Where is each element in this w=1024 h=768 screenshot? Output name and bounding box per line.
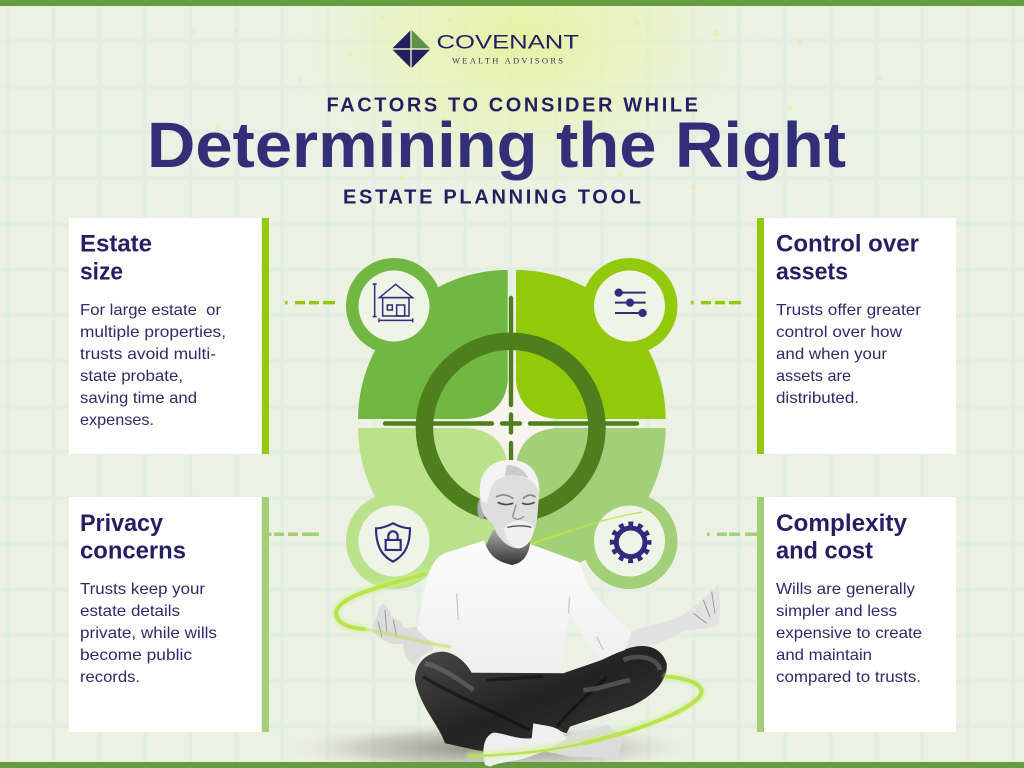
logo mark xyxy=(392,30,430,68)
privacy text xyxy=(80,581,217,686)
control text: Trusts offer greater xyxy=(776,302,922,319)
face details xyxy=(497,495,535,519)
control text: control over how xyxy=(776,324,902,341)
shirt xyxy=(417,541,632,673)
quadrant: control over assets xyxy=(516,258,678,419)
privacy heading: Privacy xyxy=(80,510,164,537)
glowing ring: front section xyxy=(363,629,702,756)
hair xyxy=(480,460,539,503)
complexity heading: Complexity xyxy=(776,510,908,537)
left arm and hand xyxy=(373,604,433,665)
estate size text: state probate, xyxy=(80,368,183,385)
complexity text xyxy=(776,581,922,686)
person meditating xyxy=(373,460,720,767)
logo xyxy=(392,30,580,68)
icon disc: shield xyxy=(358,506,430,576)
privacy text: records. xyxy=(80,669,140,686)
crosshair lines xyxy=(385,298,637,470)
privacy heading xyxy=(80,510,186,565)
top bar xyxy=(0,0,1024,6)
sub heading: ESTATE PLANNING TOOL xyxy=(343,186,641,208)
yellow glow behind header xyxy=(260,0,780,215)
glowing ring: back section xyxy=(336,512,642,629)
panel: privacy concerns xyxy=(69,497,269,732)
icon: gear xyxy=(613,524,649,560)
icon disc: house xyxy=(358,270,430,342)
control heading: Control over xyxy=(776,231,919,258)
centre ring xyxy=(424,341,597,514)
beard xyxy=(504,521,534,548)
header xyxy=(147,95,846,208)
control text xyxy=(776,302,922,407)
connector: estate size xyxy=(285,301,335,304)
icon: house xyxy=(373,284,413,322)
control heading: assets xyxy=(776,258,848,286)
pants xyxy=(415,646,667,752)
privacy heading: concerns xyxy=(80,538,186,565)
complexity text: expensive to create xyxy=(776,625,922,642)
panel: control over assets xyxy=(757,218,956,454)
central quadrant diagram xyxy=(346,258,678,589)
control heading xyxy=(776,231,919,286)
estate size text: For large estate or xyxy=(80,302,222,319)
estate size text: trusts avoid multi- xyxy=(80,346,216,363)
icon disc: gear xyxy=(594,506,665,576)
estate size heading xyxy=(80,231,152,286)
quadrant: estate size xyxy=(346,258,508,419)
foot: front xyxy=(483,723,566,767)
connector: privacy concerns xyxy=(269,533,319,536)
privacy text: become public xyxy=(80,647,192,664)
connector: control over assets xyxy=(691,301,741,304)
complexity heading xyxy=(776,510,908,565)
head xyxy=(480,460,539,548)
icon: shield with lock xyxy=(376,523,410,562)
kicker heading: FACTORS TO CONSIDER WHILE xyxy=(326,95,698,117)
estate size heading: Estate xyxy=(80,231,152,258)
bottom bar xyxy=(0,762,1024,768)
control text: and when your xyxy=(776,346,888,363)
privacy text: estate details xyxy=(80,603,180,620)
ear xyxy=(477,498,486,519)
connector: complexity and cost xyxy=(707,533,757,536)
complexity text: simpler and less xyxy=(776,603,897,620)
privacy text: private, while wills xyxy=(80,625,217,642)
estate size text: expenses. xyxy=(80,412,154,429)
quadrant: complexity and cost xyxy=(516,428,678,589)
floor shadow xyxy=(275,721,705,768)
right arm and hand xyxy=(625,584,720,651)
main title: Determining the Right xyxy=(147,109,846,181)
estate size text xyxy=(80,302,226,429)
foot: rear xyxy=(547,725,623,758)
control text: assets are xyxy=(776,368,851,385)
estate size text: saving time and xyxy=(80,390,197,407)
privacy text: Trusts keep your xyxy=(80,581,206,598)
quadrant: privacy concerns xyxy=(346,428,508,589)
logo wordmark: COVENANT xyxy=(436,32,580,54)
icon: sliders xyxy=(615,289,647,317)
control text: distributed. xyxy=(776,390,859,407)
complexity heading: and cost xyxy=(776,538,873,565)
neck xyxy=(486,527,530,565)
centre tint xyxy=(469,381,553,465)
complexity text: compared to trusts. xyxy=(776,669,921,686)
complexity text: Wills are generally xyxy=(776,581,915,598)
complexity text: and maintain xyxy=(776,647,872,664)
estate size heading: size xyxy=(80,258,123,286)
panel: estate size xyxy=(69,218,269,454)
icon disc: sliders xyxy=(594,270,665,342)
estate size text: multiple properties, xyxy=(80,324,226,341)
logo tagline: WEALTH ADVISORS xyxy=(452,56,563,66)
panel: complexity and cost xyxy=(757,497,956,732)
